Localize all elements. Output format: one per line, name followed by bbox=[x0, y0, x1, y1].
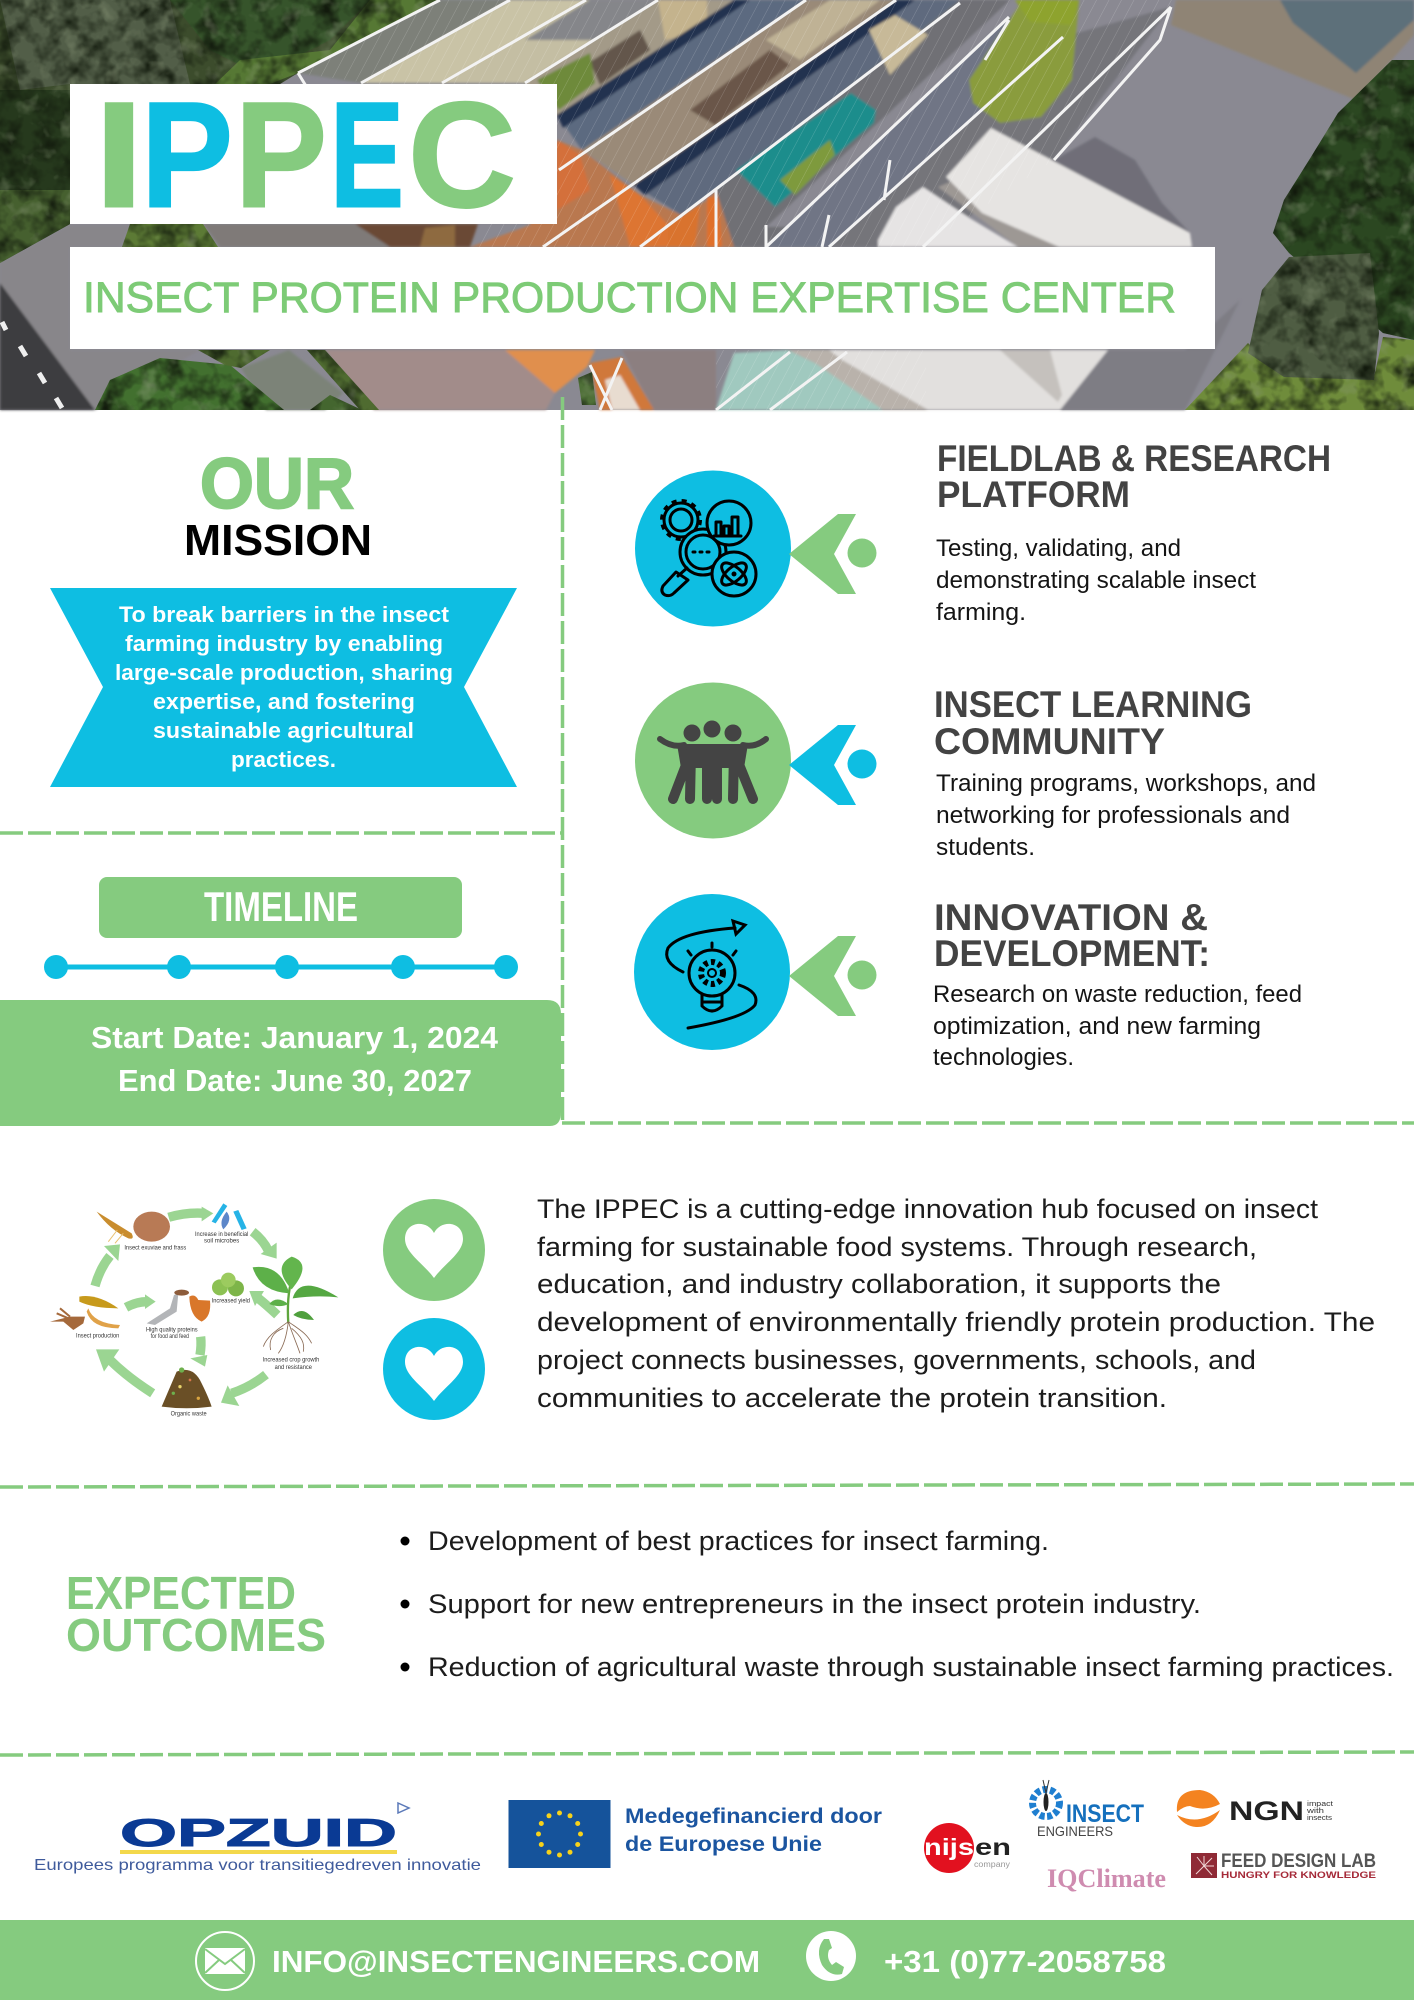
circular economy diagram: Increased crop growth bbox=[263, 1358, 319, 1364]
logo: NGN: impact bbox=[1307, 1801, 1333, 1808]
mission ribbon: large-scale production, sharing bbox=[115, 660, 453, 685]
pillar 2 icon: community bbox=[635, 682, 791, 838]
surroundings bbox=[1171, 0, 1414, 100]
logo: Nijsen: en bbox=[975, 1834, 1011, 1860]
title box: IPPEC: E bbox=[330, 70, 404, 238]
project description: communities to accelerate the protein transition. bbox=[537, 1383, 1167, 1413]
logo: Nijsen bbox=[924, 1823, 1011, 1873]
pillar 3 text: technologies. bbox=[933, 1044, 1074, 1071]
logo: Feed Design Lab: FEED DESIGN LAB bbox=[1221, 1851, 1376, 1872]
mission ribbon: To break barriers in the insect bbox=[119, 602, 450, 627]
timeline track with dots bbox=[44, 955, 518, 979]
pillar 2 arrow marker bbox=[789, 725, 876, 805]
chicken and fork bbox=[189, 1296, 210, 1322]
timeline heading: TIMELINE bbox=[204, 883, 358, 930]
pillar 1 text: farming. bbox=[936, 599, 1026, 626]
mission ribbon bbox=[50, 588, 517, 787]
logo: NGN bbox=[1177, 1790, 1333, 1827]
logo: Feed Design Lab: HUNGRY FOR KNOWLEDGE bbox=[1221, 1870, 1376, 1881]
pillar 2 text: networking for professionals and bbox=[936, 802, 1290, 829]
mission ribbon: sustainable agricultural bbox=[153, 718, 414, 743]
timeline heading bbox=[99, 877, 462, 938]
project description bbox=[537, 1194, 1375, 1413]
logo: Insect Engineers: INSECT bbox=[1066, 1800, 1144, 1828]
circular economy diagram: and resistance bbox=[275, 1365, 313, 1371]
hero aerial image of the greenhouse bbox=[0, 0, 1414, 410]
footer contact bar bbox=[0, 1920, 1414, 2000]
pillar 2 text: students. bbox=[936, 834, 1035, 861]
logo: Nijsen: nijs bbox=[924, 1834, 974, 1860]
logo: Nijsen: company bbox=[974, 1860, 1010, 1869]
pillar 2 text: COMMUNITY bbox=[934, 721, 1165, 762]
lower part bbox=[505, 350, 595, 393]
circular economy diagram: for food and feed bbox=[151, 1334, 189, 1340]
circular economy diagram: Organic waste bbox=[171, 1412, 207, 1418]
circular economy diagram: soil microbes bbox=[204, 1239, 239, 1245]
project description: development of environmentally friendly protein production. The bbox=[537, 1307, 1375, 1337]
outcomes list bbox=[400, 1526, 1394, 1682]
heading: our mission: MISSION bbox=[184, 516, 372, 565]
footer contact bar: INFO@INSECTENGINEERS.COM bbox=[272, 1944, 760, 1979]
pillar 1 text: FIELDLAB & RESEARCH bbox=[937, 438, 1331, 479]
pillar 1 icon: research bbox=[635, 470, 791, 626]
project description: project connects businesses, governments, schools, and bbox=[537, 1345, 1256, 1375]
road markings bbox=[2, 322, 62, 408]
mission ribbon: farming industry by enabling bbox=[125, 631, 443, 656]
logo: NGN: NGN bbox=[1229, 1796, 1304, 1826]
pillar 3 text: optimization, and new farming bbox=[933, 1013, 1261, 1040]
fine lattice over glass bbox=[298, 0, 1178, 247]
circular economy diagram bbox=[50, 1203, 338, 1418]
title box: IPPEC: P bbox=[235, 70, 327, 238]
circular economy diagram: Increase in beneficial bbox=[195, 1232, 248, 1238]
title box: IPPEC: C bbox=[408, 70, 516, 238]
footer contact bar: +31 (0)77-2058758 bbox=[884, 1944, 1166, 1979]
title box: IPPEC: P bbox=[141, 70, 233, 238]
heart icon: blue bbox=[383, 1318, 485, 1420]
heading: our mission: OUR bbox=[200, 445, 354, 524]
foliage bbox=[0, 0, 1414, 410]
heading: our mission bbox=[184, 445, 372, 565]
title box: IPPEC bbox=[70, 70, 557, 238]
pillar 3 text: Research on waste reduction, feed bbox=[933, 981, 1302, 1008]
pillar 2 text bbox=[934, 684, 1316, 861]
outcomes list: Support for new entrepreneurs in the insect protein industry. bbox=[428, 1589, 1201, 1619]
logo: Feed Design Lab bbox=[1191, 1851, 1376, 1881]
compost bbox=[162, 1370, 212, 1408]
mission ribbon: practices. bbox=[231, 747, 336, 772]
pillar 1 arrow marker bbox=[789, 514, 876, 594]
pillar 1 text: PLATFORM bbox=[937, 474, 1130, 515]
logo: Insect Engineers: ENGINEERS bbox=[1037, 1823, 1113, 1839]
microbes bbox=[212, 1203, 227, 1223]
logo: EU co-funding: Medegefinancierd door bbox=[625, 1805, 882, 1828]
logo: OPZUID bbox=[34, 1803, 481, 1874]
subtitle box: INSECT PROTEIN PRODUCTION EXPERTISE CENTER bbox=[83, 274, 1176, 322]
circular economy diagram: High quality proteins bbox=[146, 1327, 198, 1333]
timeline dates panel: End Date: June 30, 2027 bbox=[118, 1063, 472, 1098]
circular economy diagram: Increased yield bbox=[212, 1299, 250, 1305]
logo: EU co-funding bbox=[508, 1800, 882, 1868]
white frame rails bbox=[298, 0, 1171, 410]
insects bbox=[97, 1212, 133, 1239]
icon: envelope bbox=[196, 1932, 254, 1990]
outcomes list: Development of best practices for insect farming. bbox=[428, 1526, 1049, 1556]
subtitle box bbox=[70, 247, 1215, 349]
sprouts bbox=[212, 1279, 228, 1295]
pillar 3 text: INNOVATION & bbox=[934, 897, 1208, 938]
logo: EU co-funding: de Europese Unie bbox=[625, 1833, 822, 1856]
logo: IQClimate: IQClimate bbox=[1047, 1864, 1166, 1893]
pillar 3 text: DEVELOPMENT: bbox=[934, 933, 1210, 974]
plant bbox=[288, 1280, 292, 1323]
pillar 2 text: Training programs, workshops, and bbox=[936, 770, 1316, 797]
pillar 3 arrow marker bbox=[789, 936, 876, 1016]
pillar 1 text: demonstrating scalable insect bbox=[936, 567, 1256, 594]
logo: OPZUID: OPZUID bbox=[120, 1812, 397, 1855]
heading: expected outcomes: EXPECTED bbox=[66, 1567, 296, 1619]
project description: farming for sustainable food systems. Through research, bbox=[537, 1232, 1257, 1262]
timeline dates panel: Start Date: January 1, 2024 bbox=[91, 1020, 499, 1055]
logo: NGN: with bbox=[1306, 1808, 1324, 1815]
logo: Insect Engineers bbox=[1032, 1780, 1144, 1839]
heading: expected outcomes bbox=[66, 1567, 326, 1661]
project description: The IPPEC is a cutting-edge innovation hub focused on insect bbox=[537, 1194, 1319, 1224]
pillar 3 icon: innovation bbox=[634, 894, 790, 1050]
logo: OPZUID: Europees programma voor transitiegedreven innovatie bbox=[34, 1857, 481, 1874]
heading: expected outcomes: OUTCOMES bbox=[66, 1609, 326, 1661]
circular economy diagram: Insect exuviae and frass bbox=[124, 1245, 186, 1251]
pillar 3 text bbox=[933, 897, 1302, 1071]
mission ribbon: expertise, and fostering bbox=[153, 689, 415, 714]
pillar 1 text bbox=[936, 438, 1331, 626]
circular economy diagram: Insect production bbox=[76, 1334, 119, 1340]
pillar 2 text: INSECT LEARNING bbox=[934, 684, 1252, 725]
icon: phone bbox=[806, 1931, 856, 1981]
timeline dates panel bbox=[0, 1000, 561, 1126]
logo: NGN: insects bbox=[1307, 1815, 1333, 1822]
project description: education, and industry collaboration, it supports the bbox=[537, 1269, 1221, 1299]
greenhouse bays bbox=[298, 0, 510, 83]
heart icon: green bbox=[383, 1199, 485, 1301]
title box: IPPEC: I bbox=[94, 70, 144, 238]
barns bbox=[878, 187, 1018, 247]
outcomes list: Reduction of agricultural waste through sustainable insect farming practices. bbox=[428, 1652, 1394, 1682]
pillar 1 text: Testing, validating, and bbox=[936, 535, 1181, 562]
